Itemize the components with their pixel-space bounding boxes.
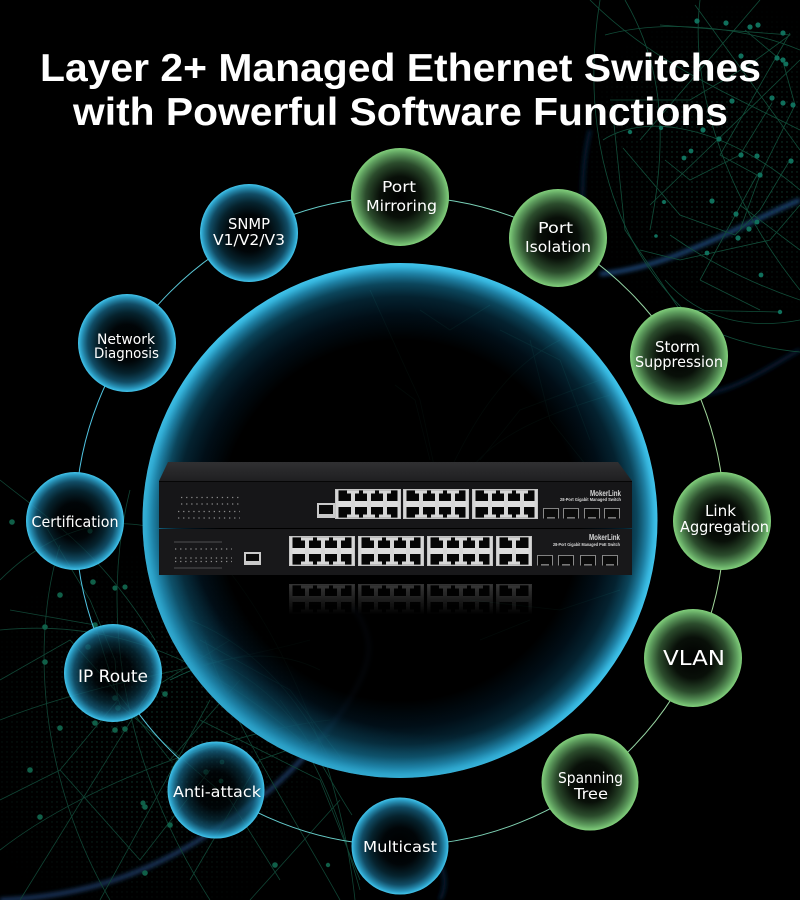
node: Certification: Certification (32, 513, 118, 531)
node: Port Mirroring (351, 148, 449, 246)
node: Multicast: Multicast (363, 838, 437, 856)
faint network behind the sphere (170, 290, 620, 770)
upper switch brand text: 28-Port Gigabit Managed Switch (560, 497, 621, 502)
node: Link Aggregation: Aggregation (680, 518, 769, 536)
lower switch status LEDs (174, 542, 232, 568)
node: Link Aggregation: Link (705, 502, 736, 520)
node: Port Isolation: Isolation (525, 238, 591, 256)
upper switch brand text: MokerLink (590, 489, 621, 498)
node: Anti-attack (168, 742, 264, 838)
upper switch brand text (560, 489, 621, 502)
lower switch brand text: MokerLink (589, 533, 620, 542)
lower switch (159, 529, 632, 575)
node: Port Mirroring: Port (382, 178, 416, 196)
node: Port Isolation (509, 189, 607, 287)
console port (244, 552, 261, 565)
lower switch brand text: 28-Port Gigabit Managed PoE Switch (553, 542, 620, 547)
node: Anti-attack: Anti-attack (173, 783, 261, 801)
title: Layer 2+ Managed Ethernet Switches (40, 47, 761, 90)
upper switch ports (317, 490, 620, 519)
node: Multicast (352, 798, 448, 894)
lower switch ports (290, 537, 618, 566)
node: VLAN (644, 609, 742, 707)
lower switch brand text (553, 533, 620, 547)
title: with Powerful Software Functions (72, 91, 728, 134)
node: Network Diagnosis (78, 294, 176, 392)
network globe: bottom left (0, 480, 360, 900)
orbit ring (76, 196, 724, 846)
node: Storm Suppression: Storm (655, 338, 700, 356)
node: SNMP (200, 184, 298, 282)
node: Spanning Tree (542, 734, 638, 830)
node: Storm Suppression: Suppression (635, 353, 723, 371)
node: Link Aggregation (673, 472, 771, 570)
product: stacked network switches (159, 462, 632, 575)
node: Port Mirroring: Mirroring (366, 197, 437, 215)
upper switch (159, 462, 632, 528)
node: IP Route (64, 624, 162, 722)
upper switch status LEDs (178, 498, 240, 518)
big central sphere (142, 263, 658, 778)
node: Port Isolation: Port (538, 219, 573, 237)
node: Storm Suppression (630, 307, 728, 405)
node: Network Diagnosis: Diagnosis (94, 346, 159, 362)
switch reflection (290, 585, 531, 613)
node: Network Diagnosis: Network (97, 332, 156, 348)
node: SNMP: V1/V2/V3 (213, 231, 285, 249)
node: IP Route: IP Route (78, 667, 148, 686)
node: SNMP: SNMP (228, 215, 270, 233)
node: Certification (26, 472, 124, 570)
network globe: top right (587, 0, 800, 352)
node: Spanning Tree: Tree (573, 785, 608, 803)
node: Spanning Tree: Spanning (558, 769, 623, 787)
node: VLAN: VLAN (663, 646, 725, 670)
title (40, 47, 761, 134)
